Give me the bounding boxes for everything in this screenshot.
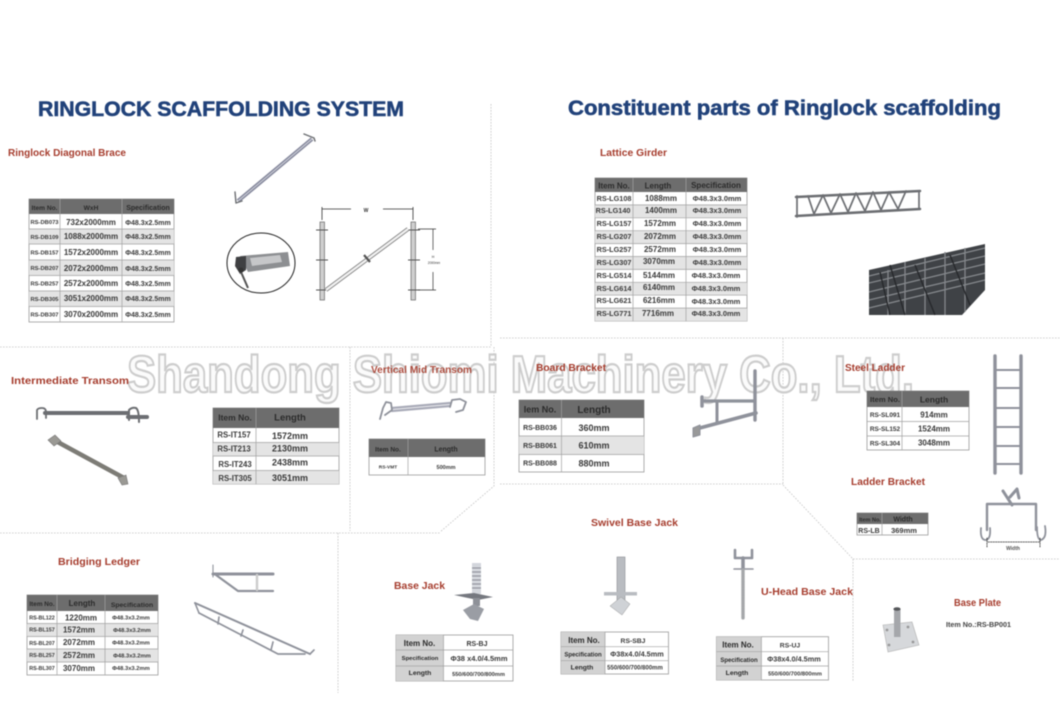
table: lattice girder: Specification (691, 181, 741, 190)
table: bridging ledger: Φ48.3x3.2mm (113, 628, 151, 634)
table: swivel base jack: Item No. (568, 636, 600, 645)
panel: ladder bracket (851, 476, 1046, 552)
table: intermediate transom: 2130mm (272, 444, 308, 454)
table: lattice girder: RS-LG257 (597, 245, 631, 254)
table: diagonal brace: Φ48.3x2.5mm (125, 234, 171, 241)
table: base jack (396, 635, 513, 681)
icon: bridging ledger side (213, 565, 273, 591)
table: base jack: 550/600/700/800mm (452, 672, 505, 678)
table: bridging ledger: 2072mm (63, 638, 95, 647)
table: ladder bracket: Width (893, 516, 913, 524)
heading: base jack: Base Jack (394, 580, 445, 592)
table: bridging ledger: Φ48.3x3.2mm (112, 666, 150, 672)
table: swivel base jack: Specification (564, 652, 602, 658)
table: bridging ledger: 1572mm (63, 626, 95, 634)
table: intermediate transom: RS-IT213 (217, 444, 251, 454)
table: bridging ledger: RS-BL257 (29, 653, 55, 659)
table: board bracket: 610mm (578, 440, 610, 450)
icon: base jack (454, 563, 493, 621)
icon: clamp detail circle (227, 233, 295, 293)
table: lattice girder: RS-LG207 (597, 232, 631, 241)
icon: ladder bracket (981, 489, 1046, 552)
diagram: brace installation (316, 207, 441, 300)
table: diagonal brace: Φ48.3x2.5mm (125, 296, 171, 303)
table: vertical mid transom: Item No. (375, 446, 401, 454)
table: lattice girder: 1572mm (644, 219, 676, 228)
heading: steel ladder: Steel Ladder (845, 362, 905, 374)
heading: u-head base jack: U-Head Base Jack (761, 586, 853, 598)
title: left: RINGLOCK SCAFFOLDING SYSTEM (38, 98, 404, 121)
table: diagonal brace: RS-DB073 (30, 220, 59, 226)
table: lattice girder: Φ48.3x3.0mm (692, 297, 741, 306)
icon: bridging ledger perspective (195, 603, 314, 654)
table: bridging ledger: Length (69, 599, 95, 608)
table: diagonal brace: Φ48.3x2.5mm (125, 281, 171, 288)
table: diagonal brace: 1572x2000mm (64, 248, 118, 257)
table: bridging ledger: RS-BL122 (29, 616, 55, 622)
table: u-head base jack: Φ38x4.0/4.5mm (767, 654, 821, 664)
table: lattice girder: 1400mm (645, 206, 677, 215)
icon: board bracket (693, 371, 756, 437)
table: board bracket: 360mm (578, 423, 610, 433)
text: base plate item number: Item No.:RS-BP001 (946, 622, 1011, 629)
table: diagonal brace (29, 199, 174, 322)
table: diagonal brace: 3070x2000mm (64, 310, 118, 319)
table: diagonal brace: RS-DB207 (30, 266, 59, 272)
table: base jack: RS-BJ (466, 641, 488, 648)
panel: u-head base jack (716, 550, 853, 680)
icon: vertical mid transom (380, 399, 466, 419)
table: lattice girder: 6216mm (643, 296, 675, 305)
table: intermediate transom: Length (274, 412, 306, 424)
icon: diagonal brace part (235, 134, 315, 203)
table: lattice girder: RS-LG621 (597, 296, 631, 305)
table: bridging ledger: 2572mm (63, 651, 95, 660)
table: swivel base jack (561, 632, 668, 674)
diagram: brace installation: 2000mm (428, 261, 441, 265)
table: board bracket (519, 400, 644, 472)
table: lattice girder: RS-LG514 (597, 271, 632, 280)
table: lattice girder: RS-LG771 (597, 309, 631, 318)
table: ladder bracket: RS-LB (858, 528, 880, 535)
table: bridging ledger: Φ48.3x3.2mm (112, 640, 150, 646)
table: lattice girder: Φ48.3x3.0mm (693, 194, 742, 203)
heading: vertical mid transom: Vertical Mid Transom (371, 364, 472, 376)
table: diagonal brace: RS-DB157 (30, 250, 59, 256)
table: bridging ledger: 3070mm (63, 664, 95, 673)
table: intermediate transom: RS-IT243 (218, 460, 252, 469)
table: u-head base jack: Specification (720, 658, 758, 664)
table: diagonal brace: RS-DB307 (30, 312, 59, 318)
panel: vertical mid transom (369, 364, 485, 475)
table: lattice girder: RS-LG157 (597, 219, 631, 228)
table: steel ladder: Length (920, 394, 948, 404)
table: ladder bracket: Item No. (859, 518, 881, 524)
table: diagonal brace: RS-DB305 (30, 297, 59, 303)
table: u-head base jack: RS-UJ (780, 642, 800, 650)
table: diagonal brace: 2572x2000mm (64, 279, 118, 288)
table: lattice girder: RS-LG307 (597, 258, 631, 267)
table: diagonal brace: 1088x2000mm (64, 232, 118, 241)
table: lattice girder: 1088mm (645, 194, 677, 203)
table: diagonal brace: WxH (84, 205, 99, 212)
table: u-head base jack: Length (726, 670, 748, 677)
table: lattice girder: 2072mm (644, 232, 676, 241)
table: vertical mid transom: 500mm (437, 465, 456, 471)
table: lattice girder: 5144mm (643, 271, 675, 280)
table: intermediate transom: 3051mm (272, 473, 308, 483)
table: bridging ledger: Φ48.3x3.2mm (113, 654, 151, 660)
table: diagonal brace: Φ48.3x2.5mm (125, 250, 171, 257)
table: lattice girder: Length (645, 182, 671, 190)
table: lattice girder: RS-LG108 (597, 194, 631, 203)
icon: lattice girder part (796, 191, 920, 217)
photo: stacked lattice girders (869, 244, 985, 315)
table: bridging ledger: RS-BL157 (29, 628, 55, 634)
table: swivel base jack: Length (571, 664, 593, 672)
table: steel ladder: 914mm (920, 410, 948, 420)
table: vertical mid transom: Length (434, 446, 458, 454)
table: u-head base jack: Item No. (722, 640, 754, 650)
table: lattice girder: Φ48.3x3.0mm (692, 271, 741, 280)
table: intermediate transom: RS-IT305 (218, 474, 252, 483)
table: diagonal brace: Φ48.3x2.5mm (125, 312, 171, 319)
heading: lattice girder: Lattice Girder (600, 147, 667, 159)
panel: lattice girder (595, 147, 985, 321)
table: bridging ledger: RS-BL207 (29, 641, 55, 647)
table: ladder bracket (857, 513, 928, 535)
table: swivel base jack: RS-SBJ (621, 638, 646, 645)
table: diagonal brace: 2072x2000mm (64, 264, 118, 273)
table: board bracket: RS-BB061 (523, 443, 557, 450)
table: intermediate transom: RS-IT157 (217, 430, 251, 440)
table: board bracket: Iem No. (524, 404, 556, 414)
panel: steel ladder (845, 356, 1021, 473)
table: bridging ledger: 1220mm (65, 614, 97, 622)
panel: bridging ledger (27, 556, 314, 675)
table: lattice girder: Φ48.3x3.0mm (693, 245, 742, 254)
table: diagonal brace: 732x2000mm (66, 218, 116, 227)
table: intermediate transom: 2438mm (272, 458, 308, 468)
table: bridging ledger: Specification (111, 602, 153, 609)
table: steel ladder: Item No. (870, 395, 900, 404)
panel: board bracket (519, 362, 756, 472)
icon: transom perspective (48, 435, 128, 485)
table: intermediate transom: Item No. (218, 412, 252, 422)
table: steel ladder: RS-SL091 (870, 412, 901, 419)
icon: ladder bracket: Width (1006, 546, 1020, 552)
table: diagonal brace: RS-DB257 (30, 282, 59, 288)
table: intermediate transom (213, 408, 339, 484)
table: board bracket: RS-BB088 (523, 460, 557, 468)
table: u-head base jack: 550/600/700/800mm (768, 672, 822, 678)
table: bridging ledger (27, 595, 158, 675)
table: vertical mid transom: RS-VMT (379, 464, 397, 470)
table: lattice girder: Item No. (598, 182, 630, 190)
watermark: Shandong Shiomi Machinery Co., Ltd. (127, 346, 914, 404)
table: lattice girder: 3070mm (643, 257, 675, 266)
panel: diagonal brace (8, 134, 441, 322)
table: swivel base jack: Φ38x4.0/4.5mm (610, 650, 664, 658)
icon: ladder (995, 356, 1021, 473)
table: diagonal brace: Φ48.3x2.5mm (125, 220, 171, 227)
heading: swivel base jack: Swivel Base Jack (591, 517, 678, 529)
table: diagonal brace: Specification (126, 205, 170, 212)
heading: bridging ledger: Bridging Ledger (58, 556, 140, 568)
heading: diagonal brace: Ringlock Diagonal Brace (8, 147, 126, 159)
diagram: brace installation: H (432, 255, 435, 259)
heading: board bracket: Board Bracket (536, 362, 606, 374)
table: diagonal brace: Item No. (31, 205, 58, 212)
table: steel ladder: RS-SL304 (870, 440, 901, 448)
table: intermediate transom: 1572mm (272, 431, 308, 441)
table: u-head base jack (716, 637, 828, 680)
table: lattice girder: RS-LG140 (596, 206, 630, 215)
table: base jack: Specification (402, 656, 439, 662)
title: right: Constituent parts of Ringlock scaffolding (568, 97, 1001, 120)
panel: base jack (394, 563, 513, 681)
table: lattice girder: Φ48.3x3.0mm (693, 219, 742, 228)
table: lattice girder: RS-LG614 (597, 284, 632, 293)
heading: intermediate transom: Intermediate Transom (11, 375, 129, 387)
icon: base plate (883, 607, 919, 652)
table: lattice girder: Φ48.3x3.0mm (693, 258, 742, 267)
table: steel ladder: RS-SL152 (870, 426, 901, 433)
table: vertical mid transom (369, 439, 485, 475)
table: lattice girder: 6140mm (643, 283, 675, 292)
table: bridging ledger: Item No. (29, 601, 55, 608)
table: bridging ledger: RS-BL307 (29, 666, 55, 672)
table: base jack: Item No. (404, 639, 435, 648)
table: lattice girder: 7716mm (642, 309, 674, 318)
table: steel ladder: 3048mm (918, 438, 950, 448)
panel: intermediate transom (11, 375, 339, 485)
table: base jack: Φ38 x4.0/4.5mm (450, 654, 508, 663)
table: board bracket: 880mm (578, 458, 610, 468)
table: steel ladder: 1524mm (918, 424, 950, 434)
table: lattice girder (595, 178, 747, 321)
table: lattice girder: Φ48.3x3.0mm (692, 309, 741, 318)
panel: base plate (883, 597, 1011, 652)
panel: swivel base jack (561, 517, 678, 674)
table: lattice girder: Φ48.3x3.0mm (693, 206, 742, 215)
table: lattice girder: Φ48.3x3.0mm (692, 284, 741, 293)
table: base jack: Length (409, 670, 431, 677)
table: diagonal brace: 3051x2000mm (64, 294, 118, 303)
table: steel ladder (867, 391, 969, 450)
table: swivel base jack: 550/600/700/800mm (607, 666, 663, 672)
table: board bracket: RS-BB036 (523, 425, 557, 432)
icon: swivel base jack (604, 557, 637, 615)
table: diagonal brace: RS-DB109 (30, 235, 59, 241)
icon: u-head base jack (734, 550, 753, 618)
diagram: brace installation: W (364, 208, 369, 214)
table: diagonal brace: Φ48.3x2.5mm (125, 266, 171, 273)
icon: transom side view (37, 408, 147, 422)
heading: base plate: Base Plate (954, 597, 1001, 609)
heading: ladder bracket: Ladder Bracket (851, 476, 925, 488)
table: lattice girder: Φ48.3x3.0mm (693, 232, 742, 241)
table: ladder bracket: 369mm (891, 526, 917, 535)
table: lattice girder: 2572mm (644, 245, 676, 254)
table: bridging ledger: Φ48.3x3.2mm (112, 616, 150, 622)
table: board bracket: Length (577, 405, 611, 416)
